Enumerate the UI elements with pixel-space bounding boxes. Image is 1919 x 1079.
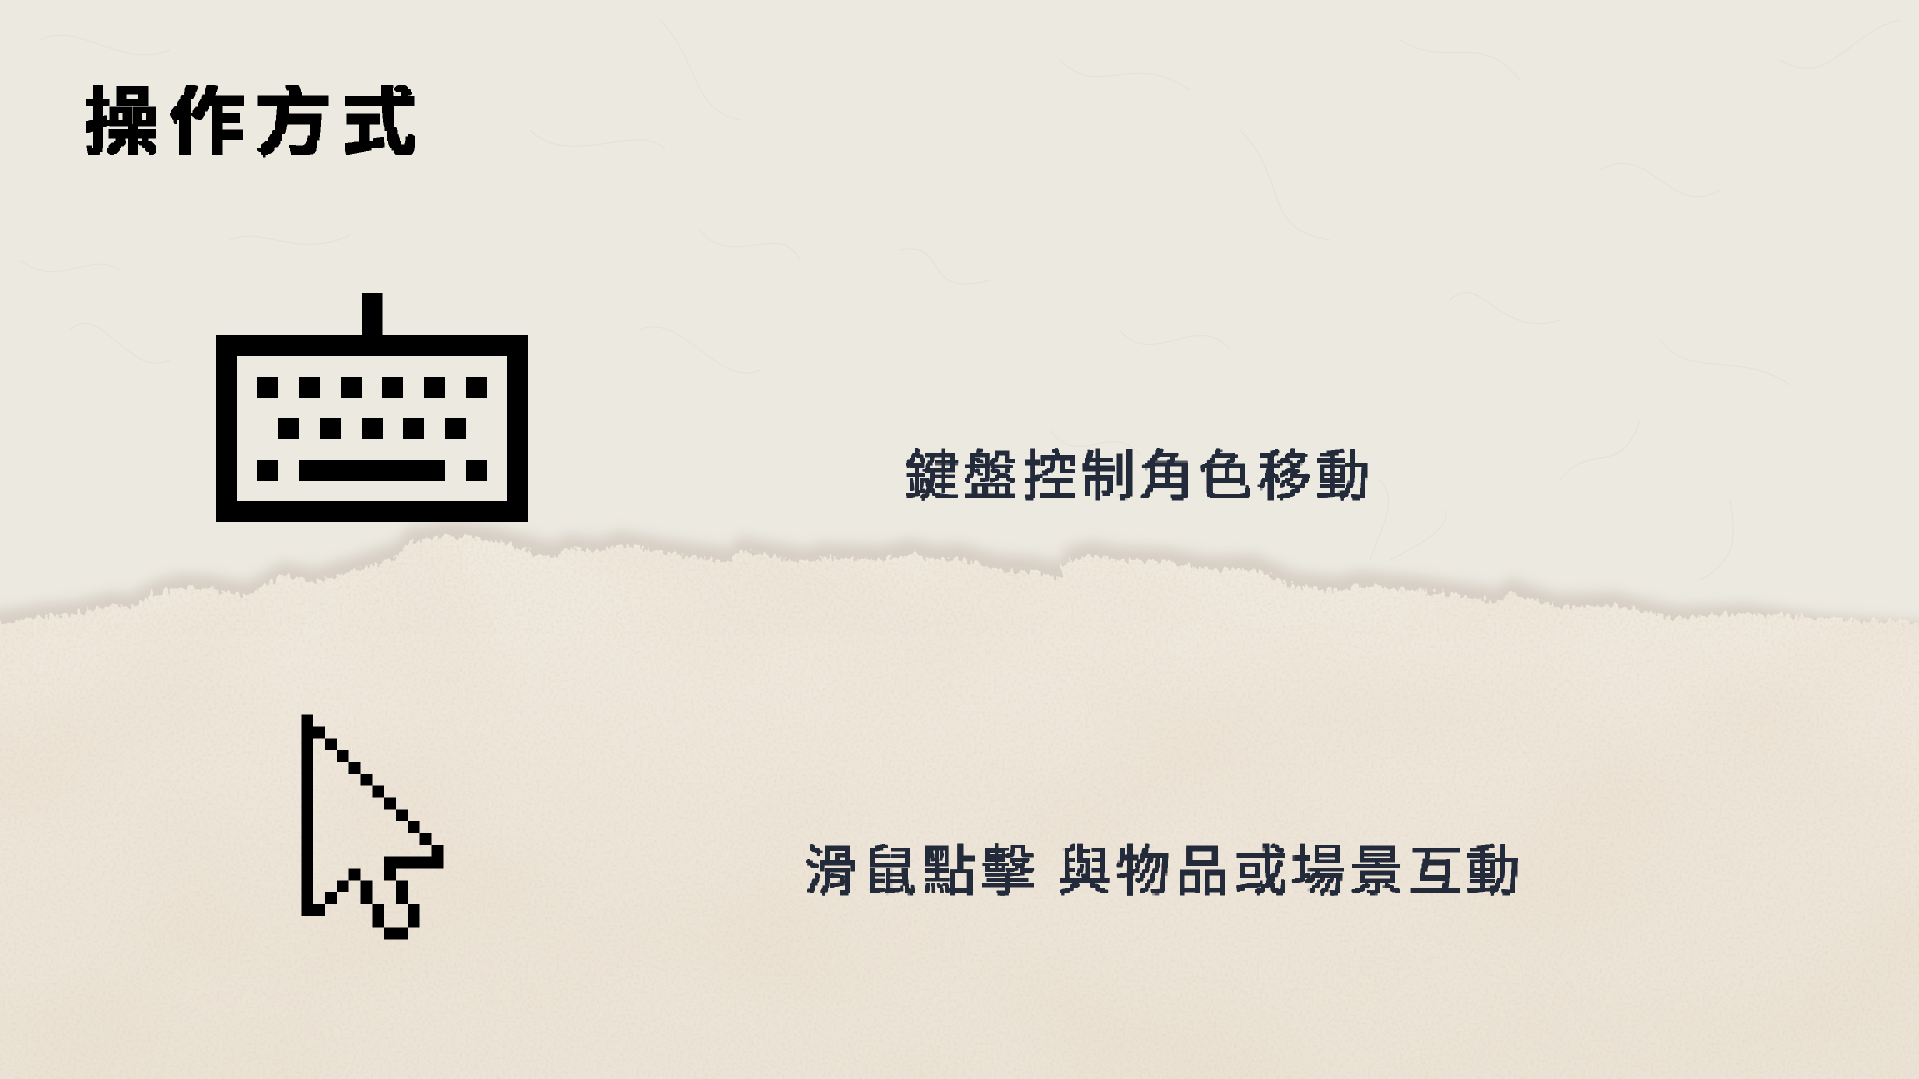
background: lower torn paper sheet xyxy=(0,535,1919,1079)
text: keyboard description: 鍵盤控制角色移動 xyxy=(905,447,1370,507)
lower paper texture xyxy=(0,536,1919,1079)
title: 操作方式 xyxy=(83,81,417,166)
icon: mouse cursor xyxy=(301,715,443,939)
text: mouse description: 滑鼠點擊與物品或場景互動 xyxy=(804,842,1520,902)
torn paper edge shadow xyxy=(0,522,1919,680)
icon: keyboard xyxy=(216,293,528,522)
